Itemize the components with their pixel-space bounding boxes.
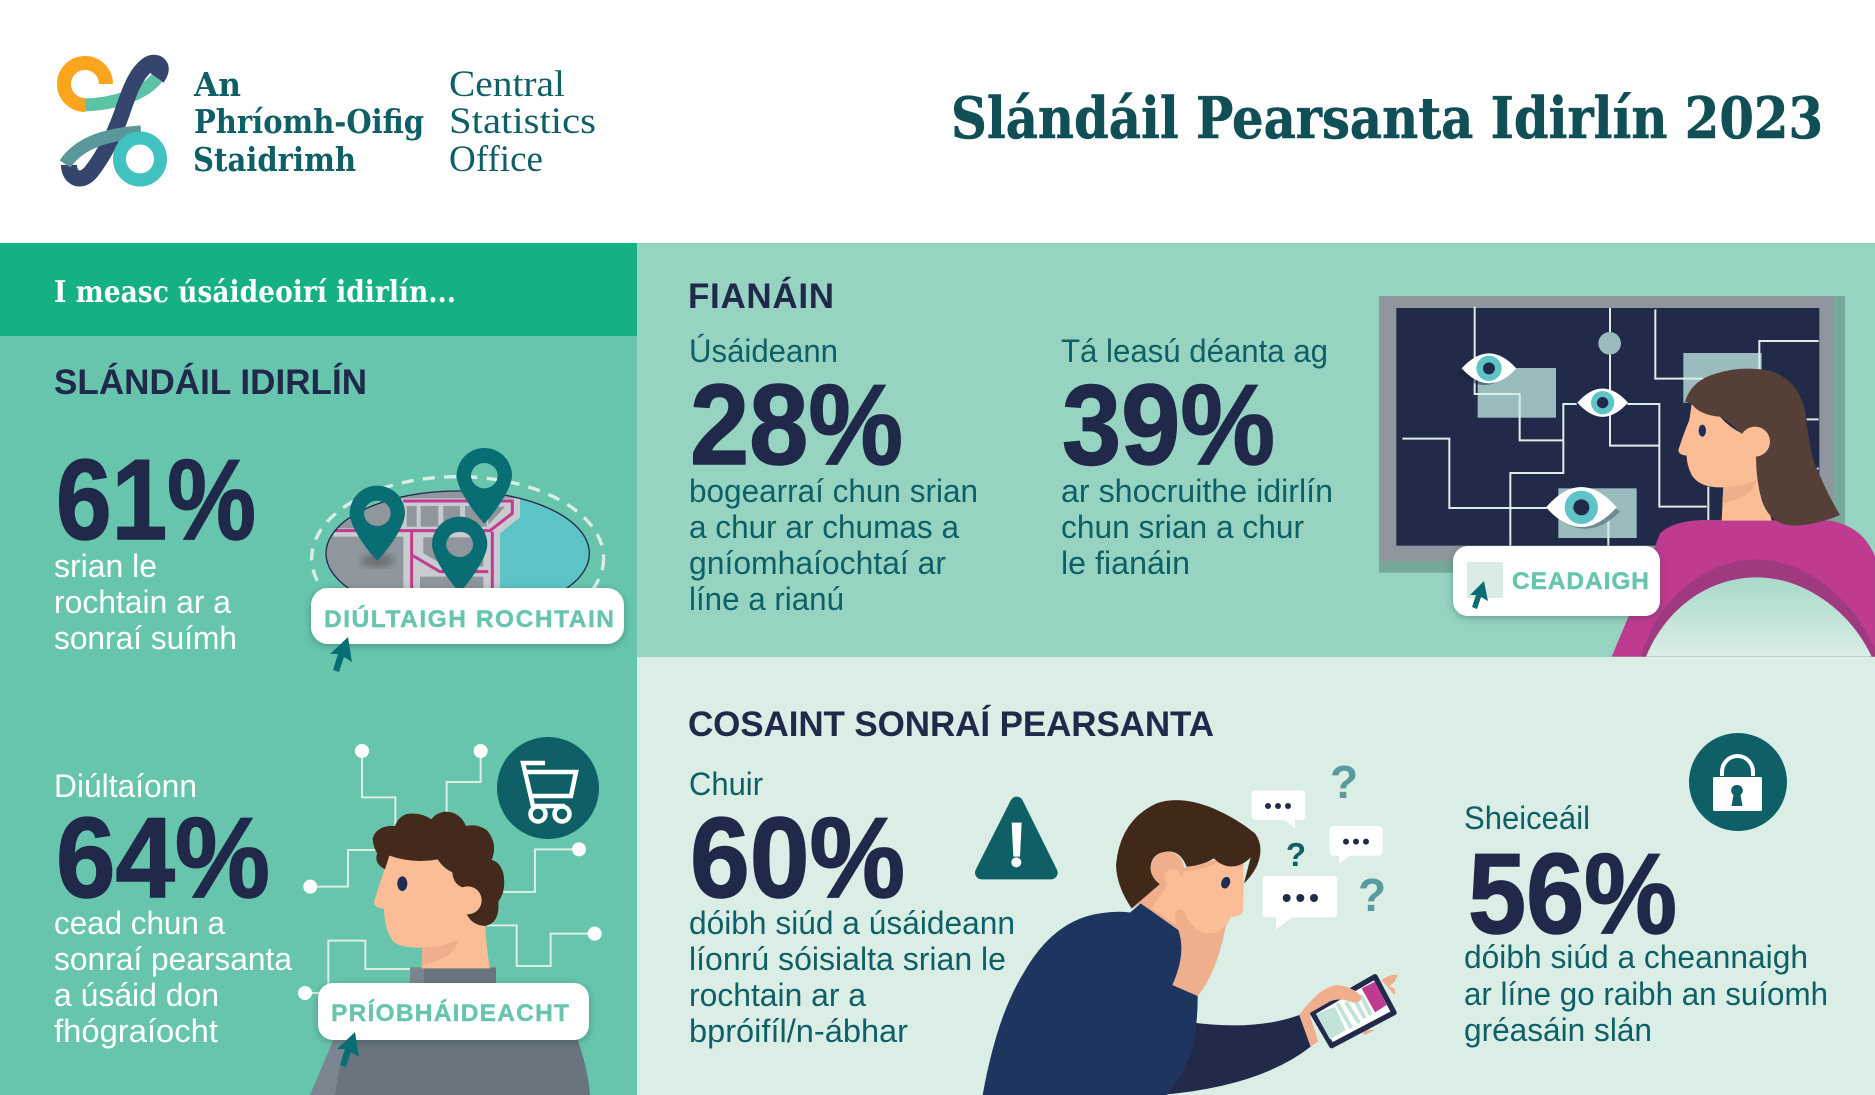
heading: cookies: FIANÁIN bbox=[688, 276, 834, 316]
logo text: English name: Statistics bbox=[449, 101, 596, 142]
stat: 28% bbox=[689, 333, 978, 617]
eye 3 bbox=[1546, 487, 1620, 529]
circuit lines bbox=[305, 751, 595, 993]
stat: 28%: gníomhaíochtaí ar bbox=[689, 545, 946, 581]
ear bbox=[1740, 427, 1770, 457]
ear bbox=[1151, 852, 1184, 885]
torso bbox=[983, 903, 1198, 1095]
stat: 60%: bpróifíl/n-ábhar bbox=[689, 1013, 908, 1049]
logo text: Irish name: Staidrimh bbox=[193, 140, 356, 179]
icon: cursor bbox=[1470, 581, 1488, 609]
hand bbox=[1299, 985, 1362, 1047]
torso bbox=[1612, 520, 1875, 657]
stat: 39% bbox=[1061, 333, 1333, 581]
stat: 64%: a úsáid don bbox=[54, 977, 219, 1013]
hair bbox=[1685, 369, 1840, 526]
eye 2 bbox=[1577, 388, 1628, 417]
stat: 64% bbox=[54, 768, 292, 1049]
stat: 56%: gréasáin slán bbox=[1464, 1012, 1652, 1048]
face bbox=[1152, 863, 1243, 933]
stat: 60%: 60% bbox=[690, 795, 905, 922]
icon: padlock bbox=[1689, 733, 1787, 831]
stat: 60% bbox=[689, 766, 1015, 1049]
stat: 60%: dóibh siúd a úsáideann bbox=[689, 905, 1015, 941]
logo text: English name: Office bbox=[449, 139, 543, 180]
stat: 28%: bogearraí chun srian bbox=[689, 473, 978, 509]
stat: 64%: sonraí pearsanta bbox=[54, 941, 292, 977]
stat: 39%: 39% bbox=[1062, 362, 1275, 489]
stat: 39%: Tá leasú déanta ag bbox=[1061, 333, 1328, 369]
stat: 61%: srian le bbox=[54, 548, 157, 584]
stat: 61% bbox=[54, 437, 256, 656]
logo text: English name bbox=[449, 64, 596, 180]
illustration: head with data circuit lines bbox=[298, 744, 602, 1095]
icon: cursor bbox=[337, 1032, 359, 1067]
stat: 56%: ar líne go raibh an suíomh bbox=[1464, 976, 1828, 1012]
stat: 60%: líonrú sóisialta srian le bbox=[689, 941, 1006, 977]
stat: 28%: líne a rianú bbox=[689, 581, 844, 617]
map area bbox=[326, 492, 588, 588]
stat: 28%: 28% bbox=[690, 362, 903, 489]
question marks: ? bbox=[1330, 756, 1358, 808]
stat: 56% bbox=[1464, 800, 1828, 1048]
heading: internet security: SLÁNDÁIL IDIRLÍN bbox=[54, 362, 367, 402]
illustration: woman watching monitor with eyes bbox=[1379, 296, 1875, 657]
button: deny access: DIÚLTAIGH ROCHTAIN bbox=[324, 605, 614, 633]
stat: 28%: a chur ar chumas a bbox=[689, 509, 959, 545]
button: deny access bbox=[311, 588, 624, 644]
dashed perimeter bbox=[312, 477, 604, 640]
button: allow: CEADAIGH bbox=[1512, 568, 1649, 595]
button: privacy: PRÍOBHÁIDEACHT bbox=[331, 999, 569, 1027]
icon: cursor bbox=[330, 637, 352, 672]
logo text: Irish name bbox=[193, 65, 424, 179]
chat bubbles bbox=[1252, 790, 1383, 929]
eye bbox=[397, 876, 407, 891]
stat: 64%: Diúltaíonn bbox=[54, 768, 197, 804]
pin 1 bbox=[350, 486, 405, 561]
stat: 61%: 61% bbox=[56, 437, 256, 564]
eye 1 bbox=[1457, 353, 1516, 385]
stat: 60%: Chuir bbox=[689, 766, 763, 802]
illustration: man with phone bbox=[982, 800, 1398, 1095]
bubble 1 bbox=[1252, 790, 1305, 828]
panel header text: I measc úsáideoirí idirlín... bbox=[54, 275, 456, 310]
stat: 39%: ar shocruithe idirlín bbox=[1061, 473, 1333, 509]
illustration: map with location pins bbox=[310, 448, 606, 590]
stat: 39%: chun srian a chur bbox=[1061, 509, 1304, 545]
panel: cookies bbox=[637, 243, 1875, 657]
icon: shopping cart bbox=[497, 737, 599, 839]
chair back bbox=[1641, 559, 1875, 657]
stat: 64%: fhógraíocht bbox=[54, 1013, 218, 1049]
monitor bbox=[1379, 296, 1845, 573]
bubble 3 bbox=[1263, 876, 1337, 929]
heading: personal data protection: COSAINT SONRAÍ PEARSANTA bbox=[688, 704, 1214, 744]
circuit lines bbox=[1402, 307, 1819, 546]
stat: 56%: 56% bbox=[1468, 831, 1677, 958]
stat: 64%: cead chun a bbox=[54, 905, 225, 941]
stat: 56%: Sheiceáil bbox=[1464, 800, 1590, 836]
header background bbox=[0, 0, 1875, 243]
bubble 2 bbox=[1329, 826, 1383, 864]
question marks bbox=[1286, 756, 1386, 921]
stat: 39%: le fianáin bbox=[1061, 545, 1190, 581]
logo: Central Statistics Office symbol bbox=[64, 63, 161, 180]
stat: 60%: rochtain ar a bbox=[689, 977, 866, 1013]
hair bbox=[373, 812, 504, 926]
neck and shaded skin bbox=[1130, 853, 1243, 996]
warning triangle icon bbox=[982, 803, 1051, 873]
panel: left internet security bbox=[0, 243, 637, 1095]
ear bbox=[454, 886, 482, 914]
panel: personal data protection bbox=[637, 657, 1875, 1095]
phone bbox=[1312, 977, 1394, 1046]
face bbox=[1678, 404, 1772, 521]
panel header band bbox=[0, 243, 637, 336]
question marks: ? bbox=[1286, 836, 1306, 873]
button: privacy bbox=[318, 983, 589, 1040]
logo text: Irish name: An bbox=[193, 65, 241, 104]
question marks: ? bbox=[1358, 869, 1386, 921]
logo text: English name: Central bbox=[449, 64, 565, 105]
hair bbox=[1116, 800, 1260, 908]
button: allow bbox=[1453, 546, 1660, 616]
pin 3 bbox=[432, 517, 487, 592]
sweater bbox=[310, 967, 590, 1095]
arm bbox=[1160, 1015, 1311, 1095]
stat: 61%: rochtain ar a bbox=[54, 584, 231, 620]
translucent blocks bbox=[1478, 332, 1762, 538]
eye bbox=[1699, 425, 1706, 437]
stat: 56%: dóibh siúd a cheannaigh bbox=[1464, 939, 1808, 975]
stat: 64%: 64% bbox=[56, 795, 270, 922]
logo text: Irish name: Phríomh-Oifig bbox=[194, 102, 424, 141]
pin 2 bbox=[457, 448, 512, 524]
face and neck bbox=[374, 855, 490, 968]
stat: 61%: sonraí suímh bbox=[54, 620, 237, 656]
stat: 28%: Úsáideann bbox=[689, 333, 838, 369]
eye bbox=[1220, 876, 1232, 890]
